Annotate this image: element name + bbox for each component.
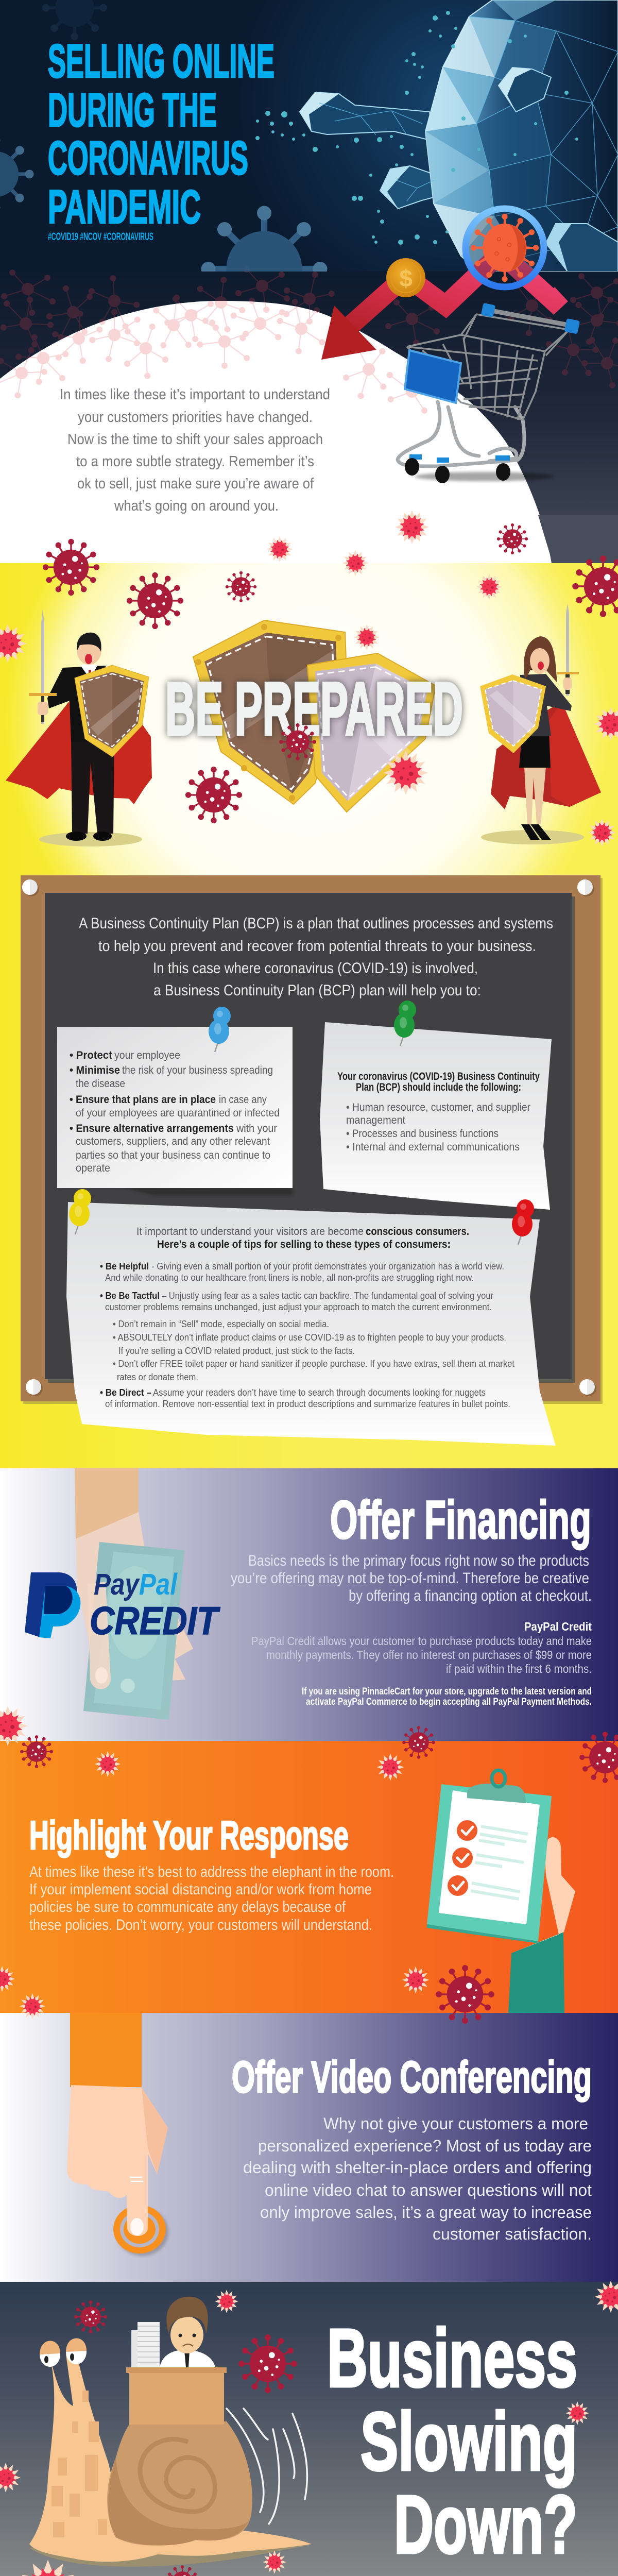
man jacket — [47, 666, 114, 742]
big low-poly coronavirus — [255, 0, 618, 272]
cart basket wires — [407, 314, 569, 420]
woman skirt — [519, 732, 551, 768]
spike 3 — [499, 67, 551, 112]
chalkboard — [45, 893, 572, 1379]
spike 2 — [380, 166, 434, 209]
note: consumer tips: Assume your readers don’t have time to search through documents looking for nuggets — [153, 1387, 486, 1398]
logo: PayPal Credit: PayPal — [94, 1568, 178, 1601]
intro text: ok to sell, just make sure you’re aware of — [77, 476, 314, 492]
woman hair and head — [524, 636, 557, 683]
note: blue pin list: in case any — [219, 1093, 267, 1106]
hero man — [6, 609, 152, 846]
snail shell — [107, 2421, 252, 2546]
note: consumer tips: • Don’t remain in “Sell” mode, especially on social media. — [113, 1318, 329, 1329]
man cape — [6, 699, 152, 804]
video body text: dealing with shelter-in-place orders and offering — [243, 2158, 592, 2177]
big brown shield — [193, 620, 347, 804]
panel: offer video conferencing — [0, 2013, 618, 2282]
video body text: Why not give your customers a more — [323, 2114, 588, 2133]
worried businessman — [160, 2297, 215, 2367]
man shield — [75, 665, 149, 757]
shell spiral — [140, 2439, 215, 2512]
intro text: to a more subtle strategy. Remember it’s — [76, 453, 314, 470]
hero small viruses — [0, 0, 328, 272]
title: DURING THE — [48, 84, 217, 137]
board intro text: a Business Continuity Plan (BCP) plan will help you to: — [153, 982, 481, 999]
icon: green pin — [394, 1001, 416, 1046]
cart frame and legs — [398, 402, 524, 466]
board intro text: In this case where coronavirus (COVID-19) is involved, — [153, 960, 478, 977]
panel: be prepared — [0, 515, 618, 1468]
note: blue pin list — [57, 1007, 293, 1195]
note: blue pin list: • Ensure that plans are in place — [70, 1093, 216, 1106]
snail eyes — [40, 2338, 87, 2367]
logo: PayPal Credit: CREDIT — [90, 1599, 220, 1643]
woman jacket — [519, 674, 572, 736]
illustration: pointing hand pressing button — [67, 2013, 168, 2256]
note: blue pin list: • Ensure alternative arrangements — [70, 1122, 234, 1134]
paper stack — [131, 2322, 160, 2367]
illustration: snail with desk — [29, 2297, 312, 2567]
man trousers — [71, 737, 114, 834]
response body text: policies be sure to communicate any delays because of — [29, 1899, 346, 1916]
video body text: online video chat to answer questions will not — [265, 2181, 592, 2199]
icon: virus in magnifier ring — [466, 208, 544, 287]
intro text — [60, 386, 330, 514]
board intro text — [79, 915, 553, 999]
icon: yellow pin — [69, 1189, 91, 1234]
woman shield — [480, 674, 546, 753]
board intro text: A Business Continuity Plan (BCP) is a plan that outlines processes and systems — [79, 915, 553, 932]
woman sword — [557, 604, 579, 696]
spike 4 — [546, 224, 618, 272]
snail spots — [52, 2391, 107, 2537]
title: SELLING ONLINE — [48, 35, 274, 88]
note: consumer tips: conscious consumers. — [366, 1225, 469, 1238]
panel: wooden board — [21, 875, 603, 1404]
facets — [469, 16, 515, 77]
cart wheels — [409, 454, 510, 463]
note: consumer tips: • ABSOULTELY don’t inflate product claims or use COVID-19 as to frighten people to buy your products. — [113, 1332, 506, 1343]
note: consumer tips: • Don’t offer FREE toilet paper or hand sanitizer if people purchase. If you have extras, sell them at market — [113, 1358, 514, 1369]
note: consumer tips: of information. Remove non-essential text in product descriptions and summarize features in bullet points. — [105, 1398, 510, 1409]
icon: shopping cart — [398, 303, 580, 483]
illustration: hand with banknote — [75, 1468, 193, 1720]
hero woman — [480, 604, 601, 844]
note: consumer tips: • Be Helpful — [100, 1261, 149, 1272]
woman cape — [491, 702, 601, 809]
video body text: customer satisfaction. — [433, 2225, 592, 2243]
intro text: what’s going on around you. — [114, 498, 279, 514]
response body text: these policies. Don’t worry, your customers will understand. — [29, 1917, 372, 1934]
response body text: At times like these it’s best to address the elephant in the room. — [29, 1863, 394, 1880]
panel: business slowing down — [0, 2282, 618, 2576]
response body text: If your implement social distancing and/or work from home — [29, 1881, 372, 1898]
hashtags: #COVID19 #NCOV #CORONAVIRUS — [48, 231, 153, 243]
note: consumer tips — [66, 1189, 556, 1446]
intro text: Now is the time to shift your sales approach — [67, 431, 323, 448]
cart blue panel — [405, 350, 461, 403]
snail body — [29, 2354, 312, 2562]
woman legs — [524, 767, 546, 824]
note: green pin checklist: • Internal and external communications — [346, 1141, 520, 1153]
icon: blue pin — [209, 1007, 231, 1052]
title — [48, 35, 274, 233]
paypal credit text: if paid within the first 6 months. — [446, 1662, 592, 1675]
note: consumer tips: – Unjustly using fear as a sales tactic can backfire. The fundamental goal of solving your — [162, 1290, 493, 1301]
video body text — [243, 2114, 592, 2243]
note: blue pin list: • Minimise — [70, 1064, 120, 1076]
woman heels — [521, 824, 551, 840]
video body text: only improve sales, it’s a great way to increase — [260, 2203, 592, 2222]
network pattern on dark — [0, 263, 618, 415]
paypal credit text: PayPal Credit — [524, 1620, 592, 1633]
network pattern on white — [0, 301, 427, 414]
video body text: personalized experience? Most of us today are — [258, 2137, 592, 2155]
intro text: In times like these it’s important to understand — [60, 386, 330, 403]
white intro blob — [0, 301, 552, 563]
man sword — [29, 609, 57, 724]
note: blue pin list: customers, suppliers, and any other relevant — [76, 1135, 270, 1147]
man head — [77, 636, 101, 665]
note: blue pin list: of your employees are quarantined or infected — [76, 1107, 280, 1119]
note: blue pin list: with your — [236, 1122, 277, 1134]
financing body text — [231, 1552, 592, 1604]
paypal credit text — [251, 1620, 592, 1675]
illustration: hand with clipboard — [427, 1770, 575, 2013]
panel: highlight your response — [0, 1741, 618, 2013]
board intro text: to help you prevent and recover from potential threats to your business. — [98, 938, 536, 955]
note: blue pin list: operate — [76, 1162, 110, 1174]
teal particles — [255, 11, 578, 245]
intro text: your customers priorities have changed. — [78, 409, 313, 426]
note: blue pin list: the risk of your business spreading — [122, 1064, 273, 1076]
title: PANDEMIC — [48, 181, 201, 233]
panel: offer financing — [0, 1468, 618, 1741]
note: consumer tips: - Giving even a small portion of your profit demonstrates your organization has a world view. — [151, 1261, 504, 1272]
man shoes — [66, 832, 87, 841]
response body text — [29, 1863, 394, 1934]
body — [425, 0, 618, 272]
logo: PayPal Credit — [25, 1568, 220, 1643]
note: green pin checklist: Plan (BCP) should include the following: — [356, 1081, 521, 1093]
note: green pin checklist — [320, 1001, 552, 1210]
note: consumer tips: It important to understand your visitors are become — [136, 1225, 364, 1238]
icon: coin: $ — [399, 265, 413, 292]
note: blue pin list: parties so that your business can continue to — [76, 1149, 270, 1161]
motion lines — [227, 2409, 307, 2524]
icon: coin — [386, 258, 425, 297]
panel: lower dark network band — [0, 272, 618, 563]
title: CORONAVIRUS — [48, 132, 248, 184]
cart handle — [489, 310, 572, 326]
viruses: orange, video and slow sections — [0, 1706, 618, 2576]
note: consumer tips: • Be Direct – — [100, 1387, 151, 1398]
heading: business slowing down — [327, 2312, 577, 2570]
pinnaclecart note — [302, 1686, 592, 1707]
big purple shield — [307, 653, 436, 812]
downward sales arrow — [321, 208, 561, 360]
desk — [129, 2373, 224, 2425]
spike 1 — [300, 92, 434, 141]
note: green pin checklist: management — [346, 1114, 405, 1126]
note: green pin checklist: • Human resource, customer, and supplier — [346, 1101, 530, 1113]
note: consumer tips: rates or donate them. — [117, 1371, 198, 1382]
note: blue pin list: • Protect — [70, 1049, 112, 1061]
note: consumer tips: customer problems remains unchanged, just adjust your approach to match the current environment. — [105, 1301, 492, 1312]
panel: hero — [0, 0, 618, 563]
note: consumer tips: • Be Be Tactful — [100, 1290, 160, 1301]
heading: highlight your response: Highlight Your Response — [29, 1812, 349, 1858]
viruses: be prepared scene — [0, 510, 618, 846]
note: green pin checklist: Your coronavirus (COVID-19) Business Continuity — [337, 1070, 540, 1082]
note: green pin checklist: • Processes and business functions — [346, 1127, 499, 1140]
icon: red pin — [512, 1199, 534, 1245]
note: consumer tips: If you’re selling a COVID related product, just stick to the facts. — [118, 1345, 355, 1356]
note: consumer tips: Here’s a couple of tips for selling to these types of consumers: — [157, 1238, 451, 1250]
note: blue pin list: your employee — [114, 1049, 180, 1061]
note: consumer tips: And while donating to our healthcare front liners is noble, all non-profits are struggling right now. — [105, 1272, 474, 1283]
note: blue pin list: the disease — [76, 1077, 125, 1090]
